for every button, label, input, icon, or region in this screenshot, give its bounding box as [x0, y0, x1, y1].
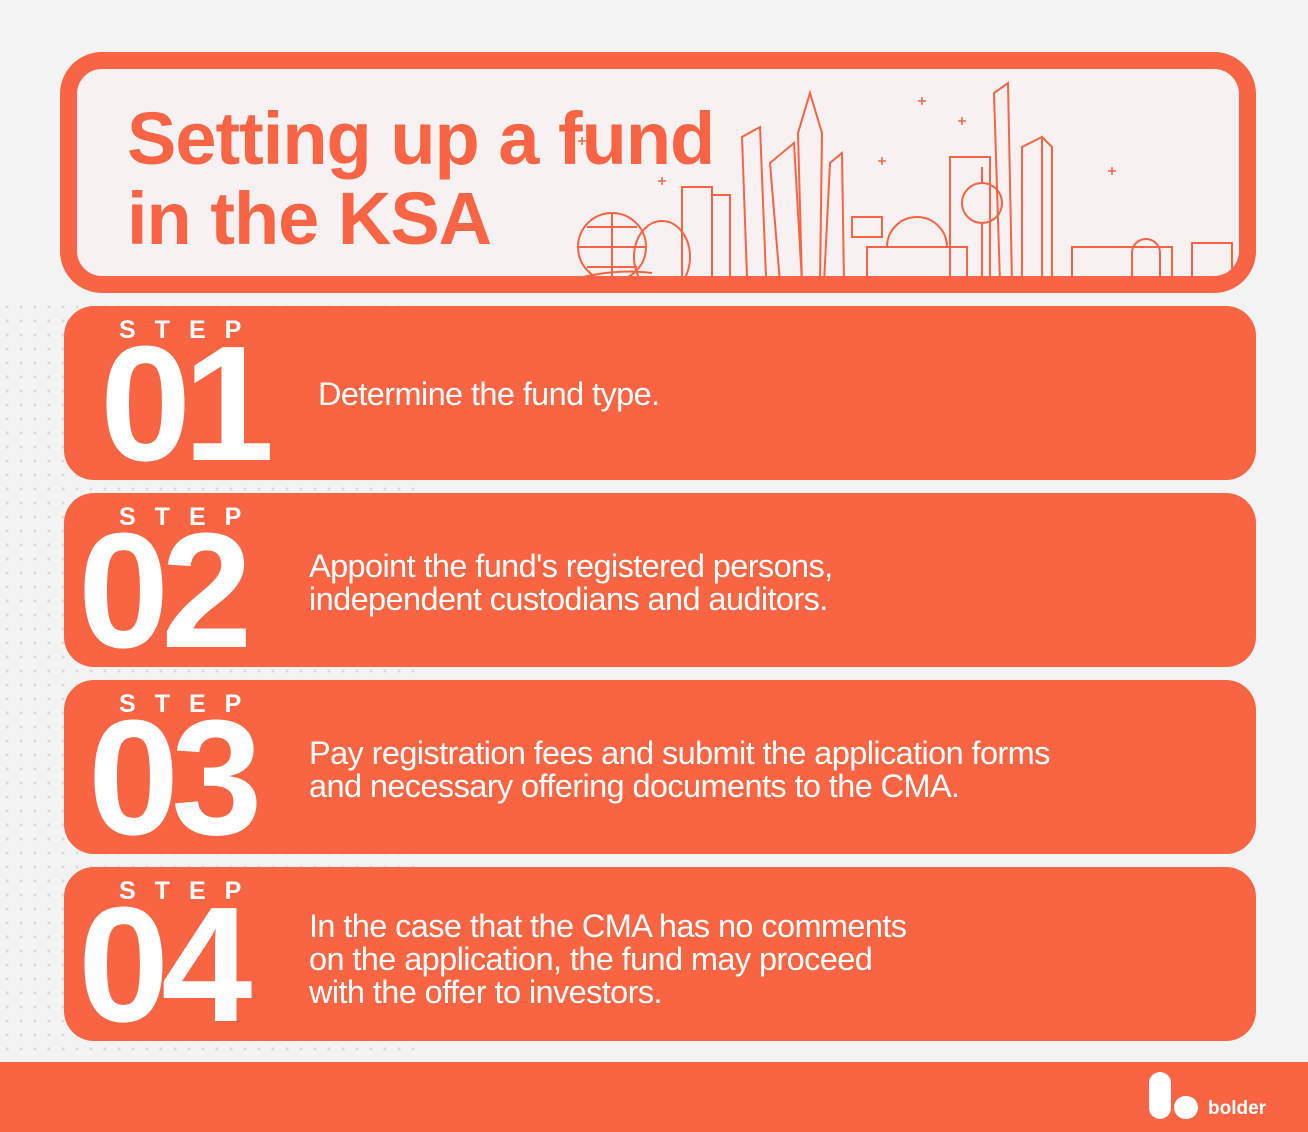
step 04: 04	[78, 873, 244, 1056]
step 02: independent custodians and auditors.	[309, 581, 828, 617]
header panel	[60, 52, 1256, 293]
step 02	[64, 493, 1256, 667]
step 01: Determine the fund type.	[318, 376, 660, 412]
step 04: with the offer to investors.	[309, 974, 662, 1010]
step 02: 02	[78, 499, 244, 682]
step 02: STEP	[119, 503, 260, 531]
step 03: 03	[88, 686, 254, 869]
footer band	[0, 1062, 1308, 1132]
title: in the KSA	[127, 177, 491, 260]
step 04: STEP	[119, 877, 260, 905]
skyline illustration	[577, 81, 1233, 276]
step 03: Pay registration fees and submit the application forms	[309, 735, 1050, 771]
step 01: 01	[100, 312, 266, 495]
title: Setting up a fund	[127, 97, 714, 180]
logo: bolder: bolder	[1208, 1098, 1266, 1119]
logo: bolder	[1149, 1072, 1266, 1119]
step 04	[64, 867, 1256, 1041]
step 04: on the application, the fund may proceed	[309, 941, 872, 977]
step 03	[64, 680, 1256, 854]
step 02: Appoint the fund's registered persons,	[309, 548, 833, 584]
step 04: In the case that the CMA has no comments	[309, 908, 906, 944]
step 03: and necessary offering documents to the CMA.	[309, 768, 959, 804]
step 01: STEP	[119, 316, 260, 344]
title	[127, 97, 714, 260]
step 03: STEP	[119, 690, 260, 718]
step 01	[64, 306, 1256, 480]
